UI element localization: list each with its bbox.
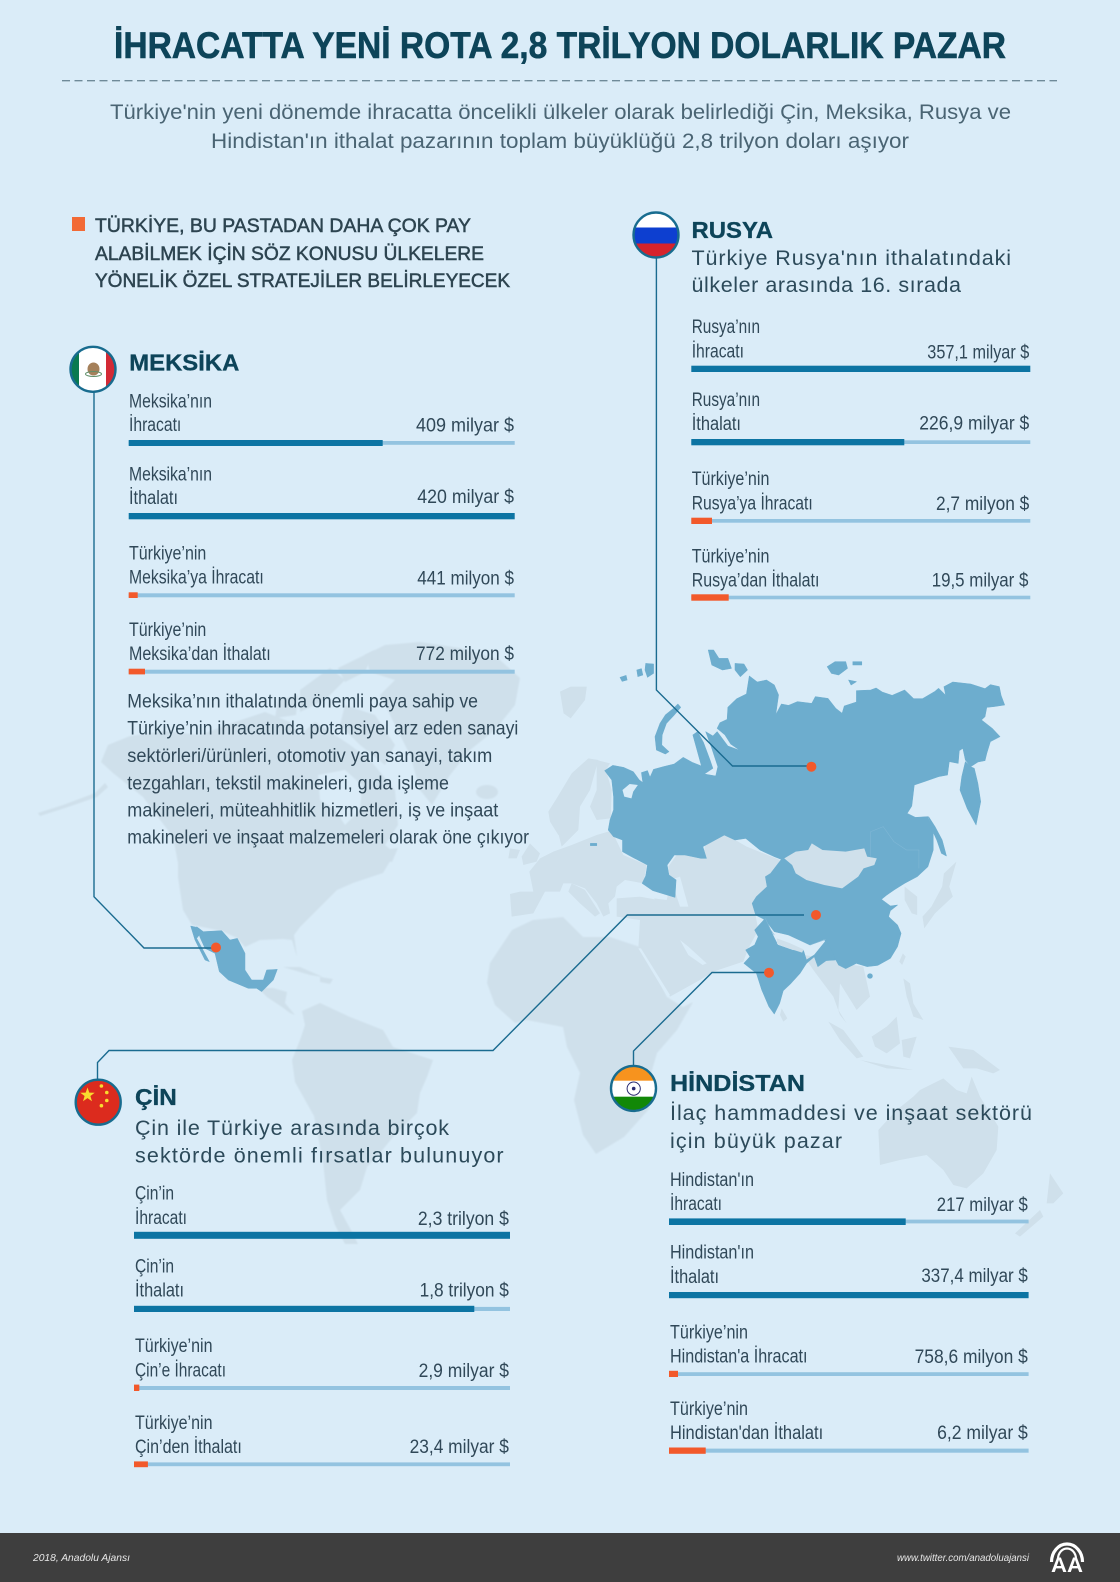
subheading: russia: ülkeler arasında 16. sırada bbox=[692, 273, 961, 297]
text block: mexico sectors bbox=[127, 691, 530, 848]
world map bbox=[38, 642, 1063, 1244]
row: china exports: 2,3 trilyon $ bbox=[418, 1209, 509, 1230]
row: china imports bbox=[134, 1256, 510, 1312]
map: russian islands and peninsulas bbox=[590, 650, 981, 1014]
heading: india: HİNDİSTAN bbox=[670, 1070, 805, 1096]
panel: russia bbox=[633, 212, 1030, 601]
connector: india bbox=[634, 972, 769, 1066]
row: turkey exports to mexico: Meksika’ya İhracatı bbox=[129, 567, 264, 588]
icon: mexico flag bbox=[70, 346, 116, 393]
marker: china bbox=[811, 910, 821, 920]
row: russia imports bbox=[691, 390, 1030, 445]
row: turkey exports to russia: Türkiye’nin bbox=[692, 469, 769, 490]
row: turkey exports to china: Türkiye’nin bbox=[135, 1336, 212, 1357]
marker: india bbox=[764, 968, 774, 978]
row: india imports: 337,4 milyar $ bbox=[921, 1266, 1028, 1287]
row: russia exports: İhracatı bbox=[692, 341, 744, 362]
row: china exports: İhracatı bbox=[135, 1208, 187, 1229]
callout: strategy note: ALABİLMEK İÇİN SÖZ KONUSU ÜLKELERE bbox=[95, 242, 484, 265]
icon: china flag bbox=[75, 1079, 121, 1126]
row: russia imports: Rusya’nın bbox=[692, 390, 760, 411]
row: china exports: Çin’in bbox=[135, 1184, 174, 1205]
row: turkey imports from china: Çin’den İthalatı bbox=[135, 1437, 242, 1458]
row: turkey exports to mexico: 441 milyon $ bbox=[417, 568, 514, 589]
subheading: india: için büyük pazar bbox=[670, 1129, 842, 1153]
marker: russia bbox=[806, 762, 816, 772]
intro text: Hindistan'ın ithalat pazarının toplam büyüklüğü 2,8 trilyon doları aşıyor bbox=[211, 129, 909, 153]
row: mexico exports: Meksika’nın bbox=[129, 391, 212, 412]
row: turkey exports to china bbox=[134, 1336, 510, 1391]
map: russia and china highlighted bbox=[590, 650, 1005, 1014]
row: india imports: İthalatı bbox=[670, 1267, 719, 1288]
panel: china bbox=[75, 1079, 510, 1467]
row: mexico exports bbox=[129, 391, 515, 446]
title: İHRACATTA YENİ ROTA 2,8 TRİLYON DOLARLIK PAZAR bbox=[114, 25, 1006, 66]
map: hudson bay bbox=[318, 770, 362, 825]
row: turkey exports to russia bbox=[691, 469, 1030, 524]
marker: mexico bbox=[211, 942, 221, 952]
row: turkey imports from china: 23,4 milyar $ bbox=[410, 1437, 509, 1458]
row: turkey exports to india: 758,6 milyon $ bbox=[915, 1347, 1028, 1368]
row: mexico imports bbox=[129, 464, 515, 519]
row: china imports: 1,8 trilyon $ bbox=[420, 1280, 509, 1302]
map: inland seas bbox=[617, 877, 707, 997]
map: white sea bbox=[622, 784, 638, 798]
connector: mexico bbox=[94, 392, 216, 948]
text block: mexico sectors: tezgahları, tekstil makineleri, gıda işleme bbox=[127, 773, 449, 794]
row: turkey exports to india bbox=[669, 1322, 1029, 1377]
connector: china bbox=[98, 915, 804, 1080]
text block: mexico sectors: Türkiye’nin ihracatında potansiyel arz eden sanayi bbox=[127, 719, 518, 740]
row: turkey imports from russia: 19,5 milyar $ bbox=[932, 571, 1029, 592]
row: turkey imports from india bbox=[669, 1399, 1029, 1454]
map: mongolia bbox=[784, 843, 877, 888]
icon: india flag bbox=[611, 1066, 657, 1111]
panel: mexico bbox=[70, 346, 530, 848]
callout: strategy note bbox=[72, 214, 510, 292]
row: russia imports: 226,9 milyar $ bbox=[919, 413, 1030, 434]
subheading: russia bbox=[692, 246, 1011, 297]
subheading: china: Çin ile Türkiye arasında birçok bbox=[135, 1116, 449, 1140]
row: mexico exports: İhracatı bbox=[129, 415, 181, 436]
subheading: india bbox=[670, 1101, 1032, 1153]
row: turkey imports from mexico bbox=[129, 620, 515, 674]
heading: russia: RUSYA bbox=[692, 217, 773, 243]
map: europe and western asia bbox=[508, 758, 780, 997]
map: china borders bbox=[765, 827, 919, 945]
row: india exports: 217 milyar $ bbox=[937, 1195, 1028, 1216]
text block: mexico sectors: sektörleri/ürünleri, otomotiv yan sanayi, takım bbox=[127, 746, 492, 767]
heading: mexico: MEKSİKA bbox=[129, 350, 239, 376]
row: china imports: Çin’in bbox=[135, 1256, 174, 1277]
map: southeast asia and oceania bbox=[780, 947, 1063, 1237]
text block: mexico sectors: makineleri ve inşaat malzemeleri olarak öne çıkıyor bbox=[127, 827, 530, 848]
connector: russia bbox=[656, 258, 811, 766]
callout: strategy note: TÜRKİYE, BU PASTADAN DAHA ÇOK PAY bbox=[95, 214, 471, 237]
map: north america bbox=[38, 650, 398, 1015]
row: turkey imports from china bbox=[134, 1413, 510, 1467]
row: mexico imports: 420 milyar $ bbox=[417, 487, 514, 508]
row: turkey imports from mexico: Meksika’dan İthalatı bbox=[129, 644, 271, 665]
text block: mexico sectors: makineleri, müteahhitlik hizmetleri, iş ve inşaat bbox=[127, 801, 499, 822]
row: india exports: İhracatı bbox=[670, 1194, 722, 1215]
row: turkey imports from india: 6,2 milyar $ bbox=[937, 1423, 1028, 1444]
subheading: india: İlaç hammaddesi ve inşaat sektörü bbox=[670, 1101, 1032, 1125]
row: turkey exports to mexico: Türkiye’nin bbox=[129, 543, 206, 564]
row: turkey imports from india: Türkiye’nin bbox=[670, 1399, 748, 1420]
map: south america bbox=[292, 1003, 433, 1244]
row: turkey imports from russia bbox=[691, 546, 1030, 601]
footer bbox=[0, 1533, 1120, 1582]
row: india exports: Hindistan'ın bbox=[670, 1170, 754, 1191]
intro text: Türkiye'nin yeni dönemde ihracatta öncelikli ülkeler olarak belirlediği Çin, Meksika, Rusya ve bbox=[110, 100, 1011, 124]
icon: orange square bullet bbox=[72, 217, 85, 231]
row: turkey imports from russia: Rusya’dan İthalatı bbox=[692, 571, 819, 592]
panel: india bbox=[611, 1066, 1032, 1454]
row: mexico exports: 409 milyar $ bbox=[416, 416, 514, 437]
row: turkey exports to india: Türkiye’nin bbox=[670, 1322, 748, 1343]
footer: credit: 2018, Anadolu Ajansı bbox=[32, 1552, 130, 1564]
text block: mexico sectors: Meksika’nın ithalatında önemli paya sahip ve bbox=[127, 691, 478, 712]
map: africa bbox=[487, 917, 693, 1154]
row: mexico imports: İthalatı bbox=[129, 488, 178, 509]
row: mexico imports: Meksika’nın bbox=[129, 464, 212, 485]
row: russia exports bbox=[691, 317, 1030, 372]
row: turkey imports from mexico: Türkiye’nin bbox=[129, 620, 206, 641]
row: india exports bbox=[669, 1170, 1029, 1225]
row: china imports: İthalatı bbox=[135, 1280, 184, 1302]
row: turkey imports from india: Hindistan'dan İthalatı bbox=[670, 1423, 823, 1444]
row: china exports bbox=[134, 1184, 510, 1239]
row: turkey exports to china: 2,9 milyar $ bbox=[419, 1361, 509, 1382]
icon: agency logo: AA bbox=[1051, 1554, 1083, 1577]
row: turkey imports from mexico: 772 milyon $ bbox=[416, 644, 514, 665]
row: turkey exports to china: Çin’e İhracatı bbox=[135, 1360, 226, 1381]
map: mexico highlighted bbox=[191, 926, 277, 992]
footer: twitter link: www.twitter.com/anadoluajansi bbox=[897, 1552, 1030, 1564]
row: turkey imports from china: Türkiye’nin bbox=[135, 1413, 212, 1434]
row: russia exports: 357,1 milyar $ bbox=[927, 342, 1030, 363]
row: turkey exports to india: Hindistan'a İhracatı bbox=[670, 1346, 808, 1368]
row: india imports bbox=[669, 1242, 1029, 1298]
callout: strategy note: YÖNELİK ÖZEL STRATEJİLER BELİRLEYECEK bbox=[95, 269, 510, 292]
row: russia imports: İthalatı bbox=[692, 414, 741, 435]
row: turkey imports from russia: Türkiye’nin bbox=[692, 546, 769, 567]
subheading: russia: Türkiye Rusya'nın ithalatındaki bbox=[692, 246, 1011, 270]
row: turkey exports to russia: 2,7 milyon $ bbox=[936, 494, 1030, 515]
icon: agency logo bbox=[1051, 1544, 1083, 1577]
heading: china: ÇİN bbox=[135, 1084, 177, 1110]
subheading: china: sektörde önemli fırsatlar bulunuyor bbox=[135, 1144, 504, 1168]
row: turkey exports to russia: Rusya’ya İhracatı bbox=[692, 493, 813, 514]
subheading: china bbox=[135, 1116, 504, 1168]
row: russia exports: Rusya’nın bbox=[692, 317, 760, 338]
row: india imports: Hindistan'ın bbox=[670, 1242, 754, 1264]
intro text bbox=[110, 100, 1011, 153]
icon: russia flag bbox=[633, 212, 679, 258]
map: greenland and iceland bbox=[365, 642, 520, 805]
map: nepal bbox=[777, 938, 804, 953]
row: turkey exports to mexico bbox=[129, 543, 515, 598]
map: east asia and islands bbox=[560, 687, 956, 965]
